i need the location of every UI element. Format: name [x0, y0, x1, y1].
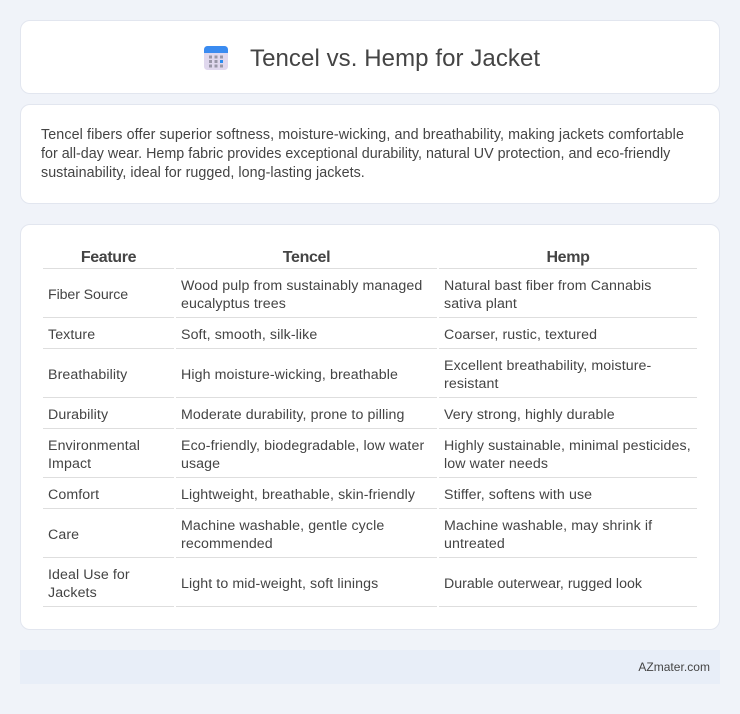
- footer bar: [20, 650, 720, 684]
- cell: Hemp durability: Very strong, highly durable: [444, 407, 615, 423]
- cell: Tencel comfort: Lightweight, breathable, skin-friendly: [181, 487, 415, 503]
- cell: Tencel texture: Soft, smooth, silk-like: [181, 327, 317, 343]
- icon: calendar: [204, 46, 228, 70]
- cell: Tencel fiber source: eucalyptus trees: [181, 296, 286, 312]
- text block: summary: sustainability, ideal for rugged, long-lasting jackets.: [41, 165, 365, 181]
- cell: Hemp ideal use: Durable outerwear, rugged look: [444, 576, 642, 592]
- cell: Tencel care: Machine washable, gentle cycle: [181, 518, 384, 534]
- row: Ideal Use for Jackets: Ideal Use for: [48, 567, 130, 583]
- row: Comfort: Comfort: [48, 487, 99, 503]
- text block: summary: [41, 126, 684, 181]
- cell: Hemp care: untreated: [444, 536, 505, 552]
- cell: Hemp environmental impact: Highly sustainable, minimal pesticides,: [444, 438, 691, 454]
- text block: summary: Tencel fibers offer superior softness, moisture-wicking, and breathability, making jackets comfortable: [41, 126, 684, 142]
- row: Environmental Impact: Environmental: [48, 438, 140, 454]
- cell: Tencel durability: Moderate durability, prone to pilling: [181, 407, 404, 423]
- row: Care: Care: [48, 527, 79, 543]
- cell: Tencel fiber source: [181, 278, 422, 312]
- cell: Tencel breathability: High moisture-wicking, breathable: [181, 367, 398, 383]
- cell: Hemp fiber source: sativa plant: [444, 296, 517, 312]
- row: Durability: Durability: [48, 407, 108, 423]
- cell: Hemp comfort: Stiffer, softens with use: [444, 487, 592, 503]
- row: Environmental Impact: [48, 438, 140, 472]
- cell: Hemp texture: Coarser, rustic, textured: [444, 327, 597, 343]
- cell: Tencel care: [181, 518, 384, 552]
- heading: Hemp: Hemp: [546, 249, 590, 266]
- panel: title card: [20, 20, 720, 94]
- row: Ideal Use for Jackets: [48, 567, 130, 601]
- cell: Hemp fiber source: Natural bast fiber from Cannabis: [444, 278, 651, 294]
- cell: Hemp breathability: Excellent breathability, moisture-: [444, 358, 651, 374]
- footer text: AZmater.com: [638, 660, 710, 674]
- cell: Hemp breathability: [444, 358, 651, 392]
- row: Environmental Impact: Impact: [48, 456, 91, 472]
- panel: comparison table: [20, 224, 720, 630]
- cell: Tencel environmental impact: [181, 438, 424, 472]
- cell: Tencel fiber source: Wood pulp from sustainably managed: [181, 278, 422, 294]
- cell: Hemp care: [444, 518, 652, 552]
- cell: Hemp care: Machine washable, may shrink if: [444, 518, 652, 534]
- cell: Tencel environmental impact: usage: [181, 456, 220, 472]
- row: Fiber Source: Fiber Source: [48, 287, 128, 303]
- cell: Tencel care: recommended: [181, 536, 273, 552]
- row: Breathability: Breathability: [48, 367, 127, 383]
- row: Texture: Texture: [48, 327, 95, 343]
- row: Ideal Use for Jackets: Jackets: [48, 585, 97, 601]
- heading: Tencel: Tencel: [283, 249, 330, 266]
- cell: Hemp environmental impact: low water needs: [444, 456, 548, 472]
- title: Tencel vs. Hemp for Jacket: [250, 45, 540, 72]
- heading: Feature: Feature: [81, 249, 136, 266]
- cell: Tencel environmental impact: Eco-friendly, biodegradable, low water: [181, 438, 424, 454]
- cell: Hemp breathability: resistant: [444, 376, 499, 392]
- cell: Hemp fiber source: [444, 278, 651, 312]
- cell: Tencel ideal use: Light to mid-weight, soft linings: [181, 576, 378, 592]
- panel: summary: [20, 104, 720, 204]
- text block: summary: for all-day wear. Hemp fabric provides exceptional durability, natural UV protection, and eco-friendly: [41, 146, 670, 162]
- cell: Hemp environmental impact: [444, 438, 691, 472]
